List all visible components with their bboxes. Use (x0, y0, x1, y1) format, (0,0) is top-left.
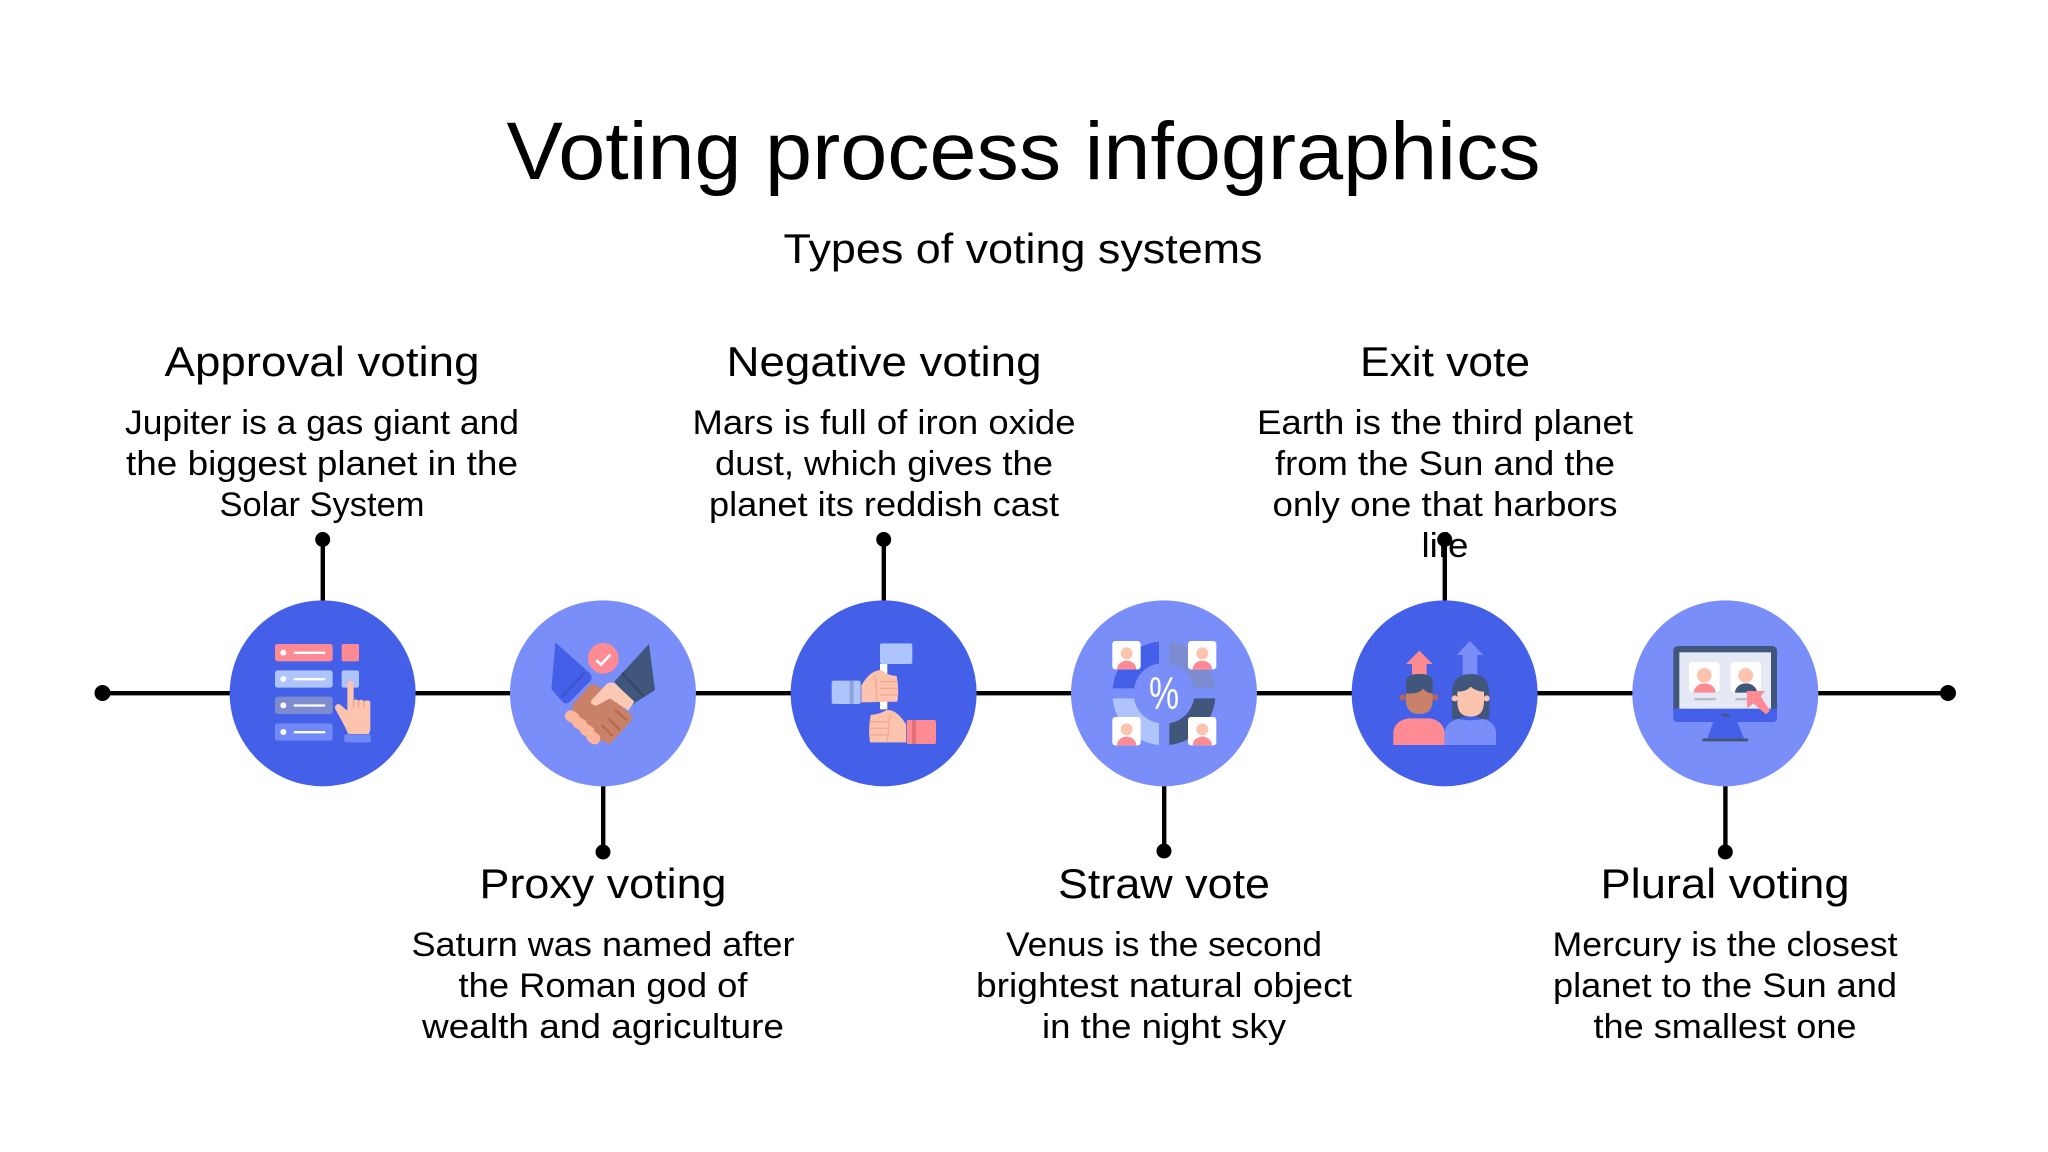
connector: straw vote (1156, 785, 1172, 858)
text block: exit vote: life (1422, 527, 1468, 565)
icon: plural voting computer screen (1632, 600, 1818, 786)
connector: plural voting (1718, 785, 1733, 860)
icon: straw vote percentage ring: % (1149, 668, 1179, 719)
text block: exit vote: Earth is the third planet (1257, 404, 1633, 442)
text block: straw vote: Venus is the second (1006, 926, 1322, 964)
icon: exit vote people with arrows (1352, 600, 1538, 786)
text block: approval voting (125, 338, 519, 524)
text block: plural voting: the smallest one (1594, 1008, 1856, 1046)
text block: negative voting (692, 338, 1076, 524)
timeline with end dots (94, 685, 1956, 701)
icon: straw vote percentage ring (1071, 600, 1257, 786)
icon: negative voting hands with flag (791, 600, 977, 786)
text block: proxy voting (412, 860, 794, 1046)
text block: negative voting: planet its reddish cast (709, 486, 1059, 524)
text block: plural voting (1552, 860, 1898, 1046)
text block: straw vote: in the night sky (1042, 1008, 1287, 1046)
text block: plural voting: Mercury is the closest (1552, 926, 1898, 964)
text block: straw vote (976, 860, 1352, 1046)
text block: approval voting: Solar System (220, 486, 424, 524)
title: Voting process infographics (506, 106, 1540, 197)
connector: approval voting (315, 532, 330, 601)
text block: plural voting: planet to the Sun and (1553, 967, 1897, 1005)
text block: proxy voting: the Roman god of (458, 967, 748, 1005)
text block: negative voting: Mars is full of iron oxide (692, 404, 1076, 442)
text block: negative voting: dust, which gives the (715, 445, 1053, 483)
text block: exit vote: only one that harbors (1272, 486, 1618, 524)
text block: negative voting: Negative voting (726, 338, 1042, 385)
connector: proxy voting (596, 785, 610, 860)
icon: approval voting ballot list (230, 600, 416, 786)
text block: exit vote: from the Sun and the (1275, 445, 1615, 483)
text block: straw vote: brightest natural object (976, 967, 1352, 1005)
connector: negative voting (876, 532, 891, 601)
text block: proxy voting: Proxy voting (480, 860, 726, 907)
text block: approval voting: Jupiter is a gas giant and (125, 404, 519, 442)
text block: exit vote (1257, 338, 1633, 565)
text block: straw vote: Straw vote (1058, 860, 1270, 907)
subtitle: Types of voting systems (784, 225, 1262, 272)
text block: plural voting: Plural voting (1600, 860, 1850, 907)
text block: approval voting: the biggest planet in the (126, 445, 518, 483)
text block: approval voting: Approval voting (164, 338, 480, 385)
text block: exit vote: Exit vote (1360, 338, 1530, 385)
connector: exit vote (1437, 532, 1452, 601)
text block: proxy voting: Saturn was named after (412, 926, 794, 964)
text block: proxy voting: wealth and agriculture (421, 1008, 784, 1046)
icon: proxy voting handshake (510, 600, 696, 786)
